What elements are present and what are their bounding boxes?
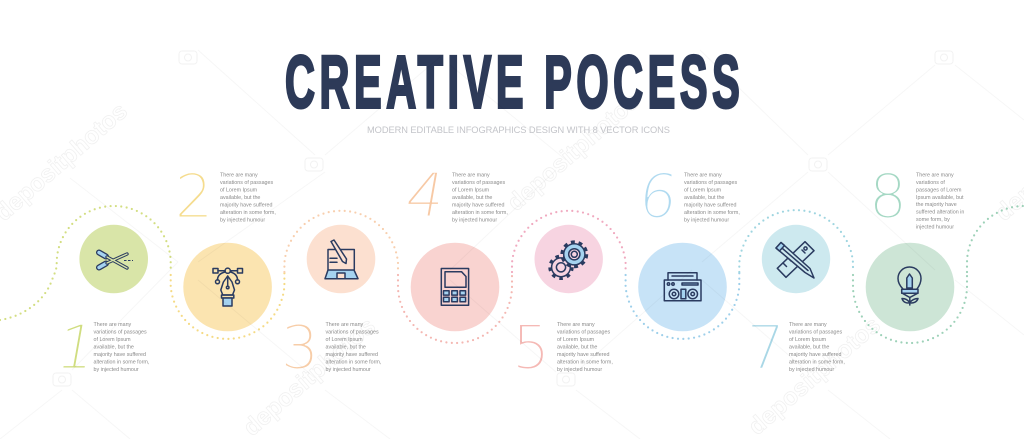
watermark: depositphotos	[502, 88, 645, 217]
number 7: 7	[747, 313, 785, 383]
text block 1: There are many	[94, 322, 132, 328]
text block 8: There are many	[916, 173, 954, 179]
text block 4: available, but the	[452, 195, 492, 201]
text block 3: alteration in some form,	[326, 359, 381, 365]
number 4: 4	[400, 161, 451, 231]
watermark: depositphotos	[238, 313, 381, 439]
text block 3: of Lorem Ipsum	[326, 337, 363, 343]
text block 2: variations of passages	[220, 180, 273, 186]
text block 3: There are many	[326, 322, 364, 328]
text block 8: passages of Lorem	[916, 187, 962, 193]
text block 3: available, but the	[326, 344, 366, 350]
icon: ruler and pencil	[776, 242, 814, 278]
text block 5: majority have suffered	[557, 352, 610, 358]
text block 4: There are many	[452, 173, 490, 179]
text block 2: alteration in some form,	[220, 210, 276, 216]
text block 7: available, but the	[789, 344, 829, 350]
dotted connector path	[0, 206, 1024, 343]
watermark: depositphotos	[743, 312, 886, 439]
icon: crossed pens	[99, 252, 133, 268]
text block 7: variations of passages	[789, 329, 842, 335]
number 2: 2	[175, 162, 213, 232]
text block 8: injected humour	[916, 224, 954, 230]
text block 1: majority have suffered	[94, 352, 146, 358]
text block 3: variations of passages	[326, 329, 379, 335]
number 8: 8	[869, 162, 907, 232]
number 5: 5	[512, 313, 550, 383]
text block 6: There are many	[684, 173, 722, 179]
text block 5: alteration in some form,	[557, 359, 613, 365]
panel: step 5	[512, 225, 613, 383]
subtitle: MODERN EDITABLE INFOGRAPHICS DESIGN WITH 8 VECTOR ICONS	[367, 125, 670, 135]
text block 2: of Lorem Ipsum	[220, 188, 258, 194]
text block 5: variations of passages	[557, 329, 610, 335]
number 3: 3	[281, 313, 319, 383]
text block 8: some form, by	[916, 217, 950, 223]
text block 5: of Lorem Ipsum	[557, 337, 595, 343]
text block 7: alteration in some form,	[789, 359, 845, 365]
text block 6: of Lorem Ipsum	[684, 188, 722, 194]
text block 4: by injected humour	[452, 218, 497, 224]
panel: step 6	[635, 162, 740, 331]
panel: step 3	[281, 225, 381, 383]
icon: radio	[664, 273, 701, 301]
text block 5: There are many	[557, 322, 595, 328]
text block 7: There are many	[789, 322, 827, 328]
text block 8: variations of	[916, 180, 945, 186]
text block 1: available, but the	[94, 344, 134, 350]
number 1: 1	[51, 313, 102, 383]
icon: pen tool	[213, 268, 242, 306]
text block 7: of Lorem Ipsum	[789, 337, 827, 343]
text block 6: alteration in some form,	[684, 210, 740, 216]
icon: light bulb plant	[898, 267, 921, 305]
title: CREATIVE POCESS	[285, 41, 740, 124]
panel: step 4	[400, 161, 508, 331]
text block 6: available, but the	[684, 195, 724, 201]
text block 8: suffered alteration in	[916, 210, 964, 216]
text block 3: by injected humour	[326, 367, 371, 373]
text block 2: by injected humour	[220, 218, 265, 224]
icon: gears	[550, 242, 587, 278]
text block 1: by injected humour	[94, 367, 139, 373]
text block 6: variations of passages	[684, 180, 737, 186]
panel: step 1	[51, 225, 149, 383]
text block 7: by injected humour	[789, 367, 834, 373]
text block 8: Ipsum available, but	[916, 195, 964, 201]
text block 1: of Lorem Ipsum	[94, 337, 131, 343]
panel: step 2	[175, 162, 276, 331]
panel: step 7	[747, 225, 845, 383]
icon: laptop with pen	[325, 240, 358, 279]
text block 5: by injected humour	[557, 367, 602, 373]
text block 4: variations of passages	[452, 180, 505, 186]
text block 4: of Lorem Ipsum	[452, 188, 490, 194]
panel: step 8	[866, 162, 964, 331]
text block 6: majority have suffered	[684, 203, 737, 209]
text block 1: variations of passages	[94, 329, 147, 335]
text block 4: majority have suffered	[452, 203, 505, 209]
text block 3: majority have suffered	[326, 352, 378, 358]
text block 1: alteration in some form,	[94, 359, 149, 365]
text block 7: majority have suffered	[789, 352, 842, 358]
number 6: 6	[635, 162, 681, 232]
text block 6: by injected humour	[684, 218, 729, 224]
text block 5: available, but the	[557, 344, 597, 350]
text block 2: available, but the	[220, 195, 260, 201]
text block 8: the majority have	[916, 202, 957, 208]
text block 2: majority have suffered	[220, 203, 273, 209]
icon: memory card device	[441, 268, 469, 305]
text block 2: There are many	[220, 173, 258, 179]
text block 4: alteration in some form,	[452, 210, 508, 216]
